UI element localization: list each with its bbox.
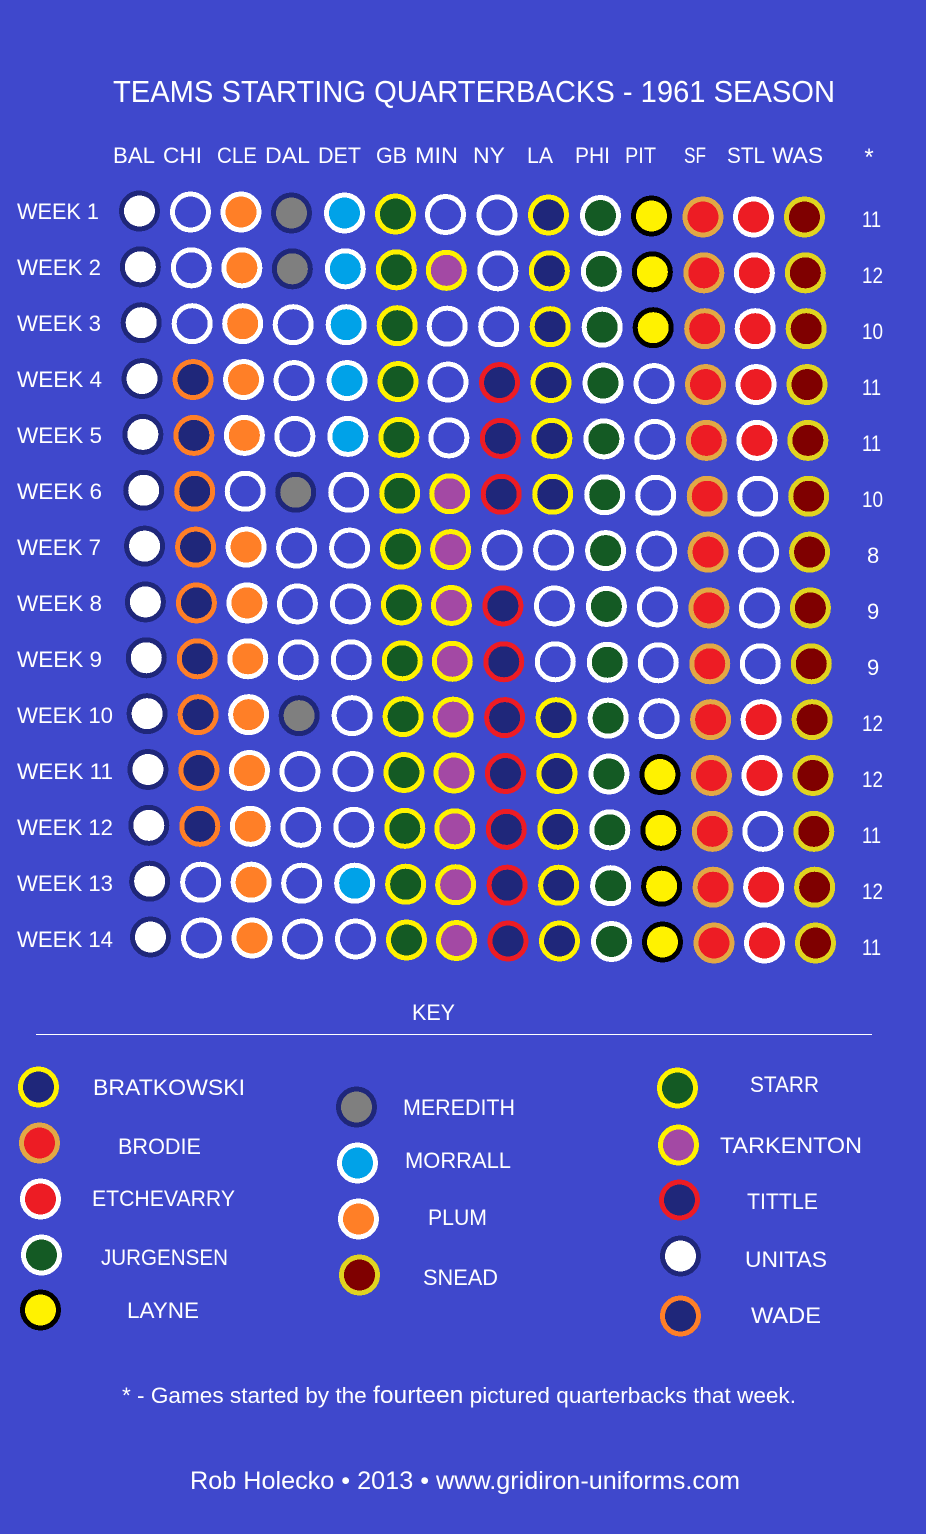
key: right column: [660, 1070, 862, 1334]
team column headers: DET: [318, 143, 361, 168]
credit line: Rob Holecko • 2013 • www.gridiron-uniforms.com: [190, 1467, 740, 1495]
quarterback grid: [122, 193, 834, 961]
row: week 12: [131, 807, 832, 849]
key item: Plum: PLUM: [428, 1205, 487, 1230]
week labels: WEEK 7: [17, 535, 101, 560]
key item: Meredith: MEREDITH: [403, 1095, 515, 1120]
team column headers: WAS: [772, 143, 823, 168]
week labels: WEEK 9: [17, 647, 102, 672]
key heading: KEY: [412, 1000, 455, 1025]
week labels: WEEK 1: [17, 199, 99, 224]
key item: Layne: LAYNE: [127, 1298, 199, 1323]
week labels: WEEK 6: [17, 479, 102, 504]
key item: Wade: [662, 1298, 821, 1334]
row: week 7: [127, 528, 828, 570]
row: week 5: [125, 416, 826, 458]
team column headers: [113, 143, 874, 171]
key item: Starr: STARR: [750, 1072, 819, 1097]
team column headers: DAL: [265, 143, 310, 168]
row: week 13: [132, 863, 833, 905]
week totals column: 11: [862, 935, 881, 960]
row: week 14: [132, 919, 834, 961]
key item: Etchevarry: ETCHEVARRY: [92, 1186, 235, 1211]
week totals column: 12: [862, 879, 883, 904]
key item: Snead: [342, 1257, 498, 1293]
week totals column: 9: [867, 599, 879, 624]
week labels: WEEK 14: [17, 927, 113, 952]
key: left column: [20, 1069, 245, 1328]
week totals column: 11: [862, 431, 881, 456]
key item: Etchevarry: [22, 1181, 235, 1217]
week totals column: 11: [862, 375, 881, 400]
key item: Unitas: UNITAS: [745, 1247, 827, 1272]
row: week 2: [122, 249, 823, 291]
week totals column: 12: [862, 263, 883, 288]
week labels: WEEK 2: [17, 255, 101, 280]
key item: Morrall: [340, 1145, 511, 1181]
team column headers: GB: [376, 143, 407, 168]
key item: Morrall: MORRALL: [405, 1148, 511, 1173]
team column headers: PIT: [625, 143, 656, 168]
key item: Snead: SNEAD: [423, 1265, 498, 1290]
row: week 3: [123, 305, 824, 347]
key item: Tittle: TITTLE: [747, 1189, 818, 1214]
key item: Bratkowski: BRATKOWSKI: [93, 1075, 245, 1100]
row: week 4: [124, 361, 825, 403]
key: middle column: [338, 1089, 515, 1293]
footnote: * - Games started by the fourteen pictured quarterbacks that week.: [122, 1382, 796, 1409]
key item: Brodie: [22, 1125, 201, 1161]
key item: Tittle: [662, 1182, 818, 1218]
week totals column: 12: [862, 711, 883, 736]
row: week 8: [127, 584, 828, 626]
team column headers: MIN: [415, 143, 458, 168]
key item: Tarkenton: [660, 1127, 862, 1163]
row: week 1: [122, 193, 822, 235]
team column headers: CHI: [163, 143, 202, 168]
week labels: WEEK 10: [17, 703, 113, 728]
key item: Unitas: [662, 1238, 827, 1274]
row: week 9: [128, 640, 829, 682]
week labels: WEEK 13: [17, 871, 113, 896]
week totals column: 12: [862, 767, 883, 792]
week totals column: 11: [862, 207, 881, 232]
week labels: WEEK 11: [17, 759, 113, 784]
team column headers: STL: [727, 143, 765, 168]
week labels: WEEK 8: [17, 591, 102, 616]
key item: Meredith: [338, 1089, 515, 1125]
team column headers: CLE: [217, 143, 257, 168]
key item: Jurgensen: JURGENSEN: [101, 1245, 228, 1270]
week labels: WEEK 12: [17, 815, 113, 840]
week totals column: 11: [862, 823, 881, 848]
title: TEAMS STARTING QUARTERBACKS - 1961 SEASON: [113, 74, 835, 109]
week labels: [17, 199, 113, 952]
key item: Wade: WADE: [751, 1303, 821, 1328]
week totals column: 8: [867, 543, 879, 568]
team column headers: BAL: [113, 143, 155, 168]
week labels: WEEK 3: [17, 311, 101, 336]
key item: Bratkowski: [20, 1069, 245, 1105]
row: week 11: [130, 752, 831, 794]
week labels: WEEK 5: [17, 423, 102, 448]
key item: Starr: [660, 1070, 819, 1106]
key item: Tarkenton: TARKENTON: [720, 1133, 862, 1158]
key item: Brodie: BRODIE: [118, 1134, 201, 1159]
row: week 6: [126, 472, 827, 514]
key item: Layne: [22, 1292, 199, 1328]
team column headers: PHI: [575, 143, 610, 168]
week totals column: 10: [862, 487, 883, 512]
team column headers: LA: [527, 143, 553, 168]
team column headers: *: [864, 144, 874, 171]
row: week 10: [129, 696, 830, 738]
week labels: WEEK 4: [17, 367, 102, 392]
key item: Jurgensen: [24, 1237, 228, 1273]
week totals column: 9: [867, 655, 879, 680]
team column headers: NY: [473, 143, 505, 168]
team column headers: SF: [684, 143, 706, 168]
week totals column: 10: [862, 319, 883, 344]
week totals column: [862, 207, 883, 960]
key item: Plum: [340, 1201, 487, 1237]
